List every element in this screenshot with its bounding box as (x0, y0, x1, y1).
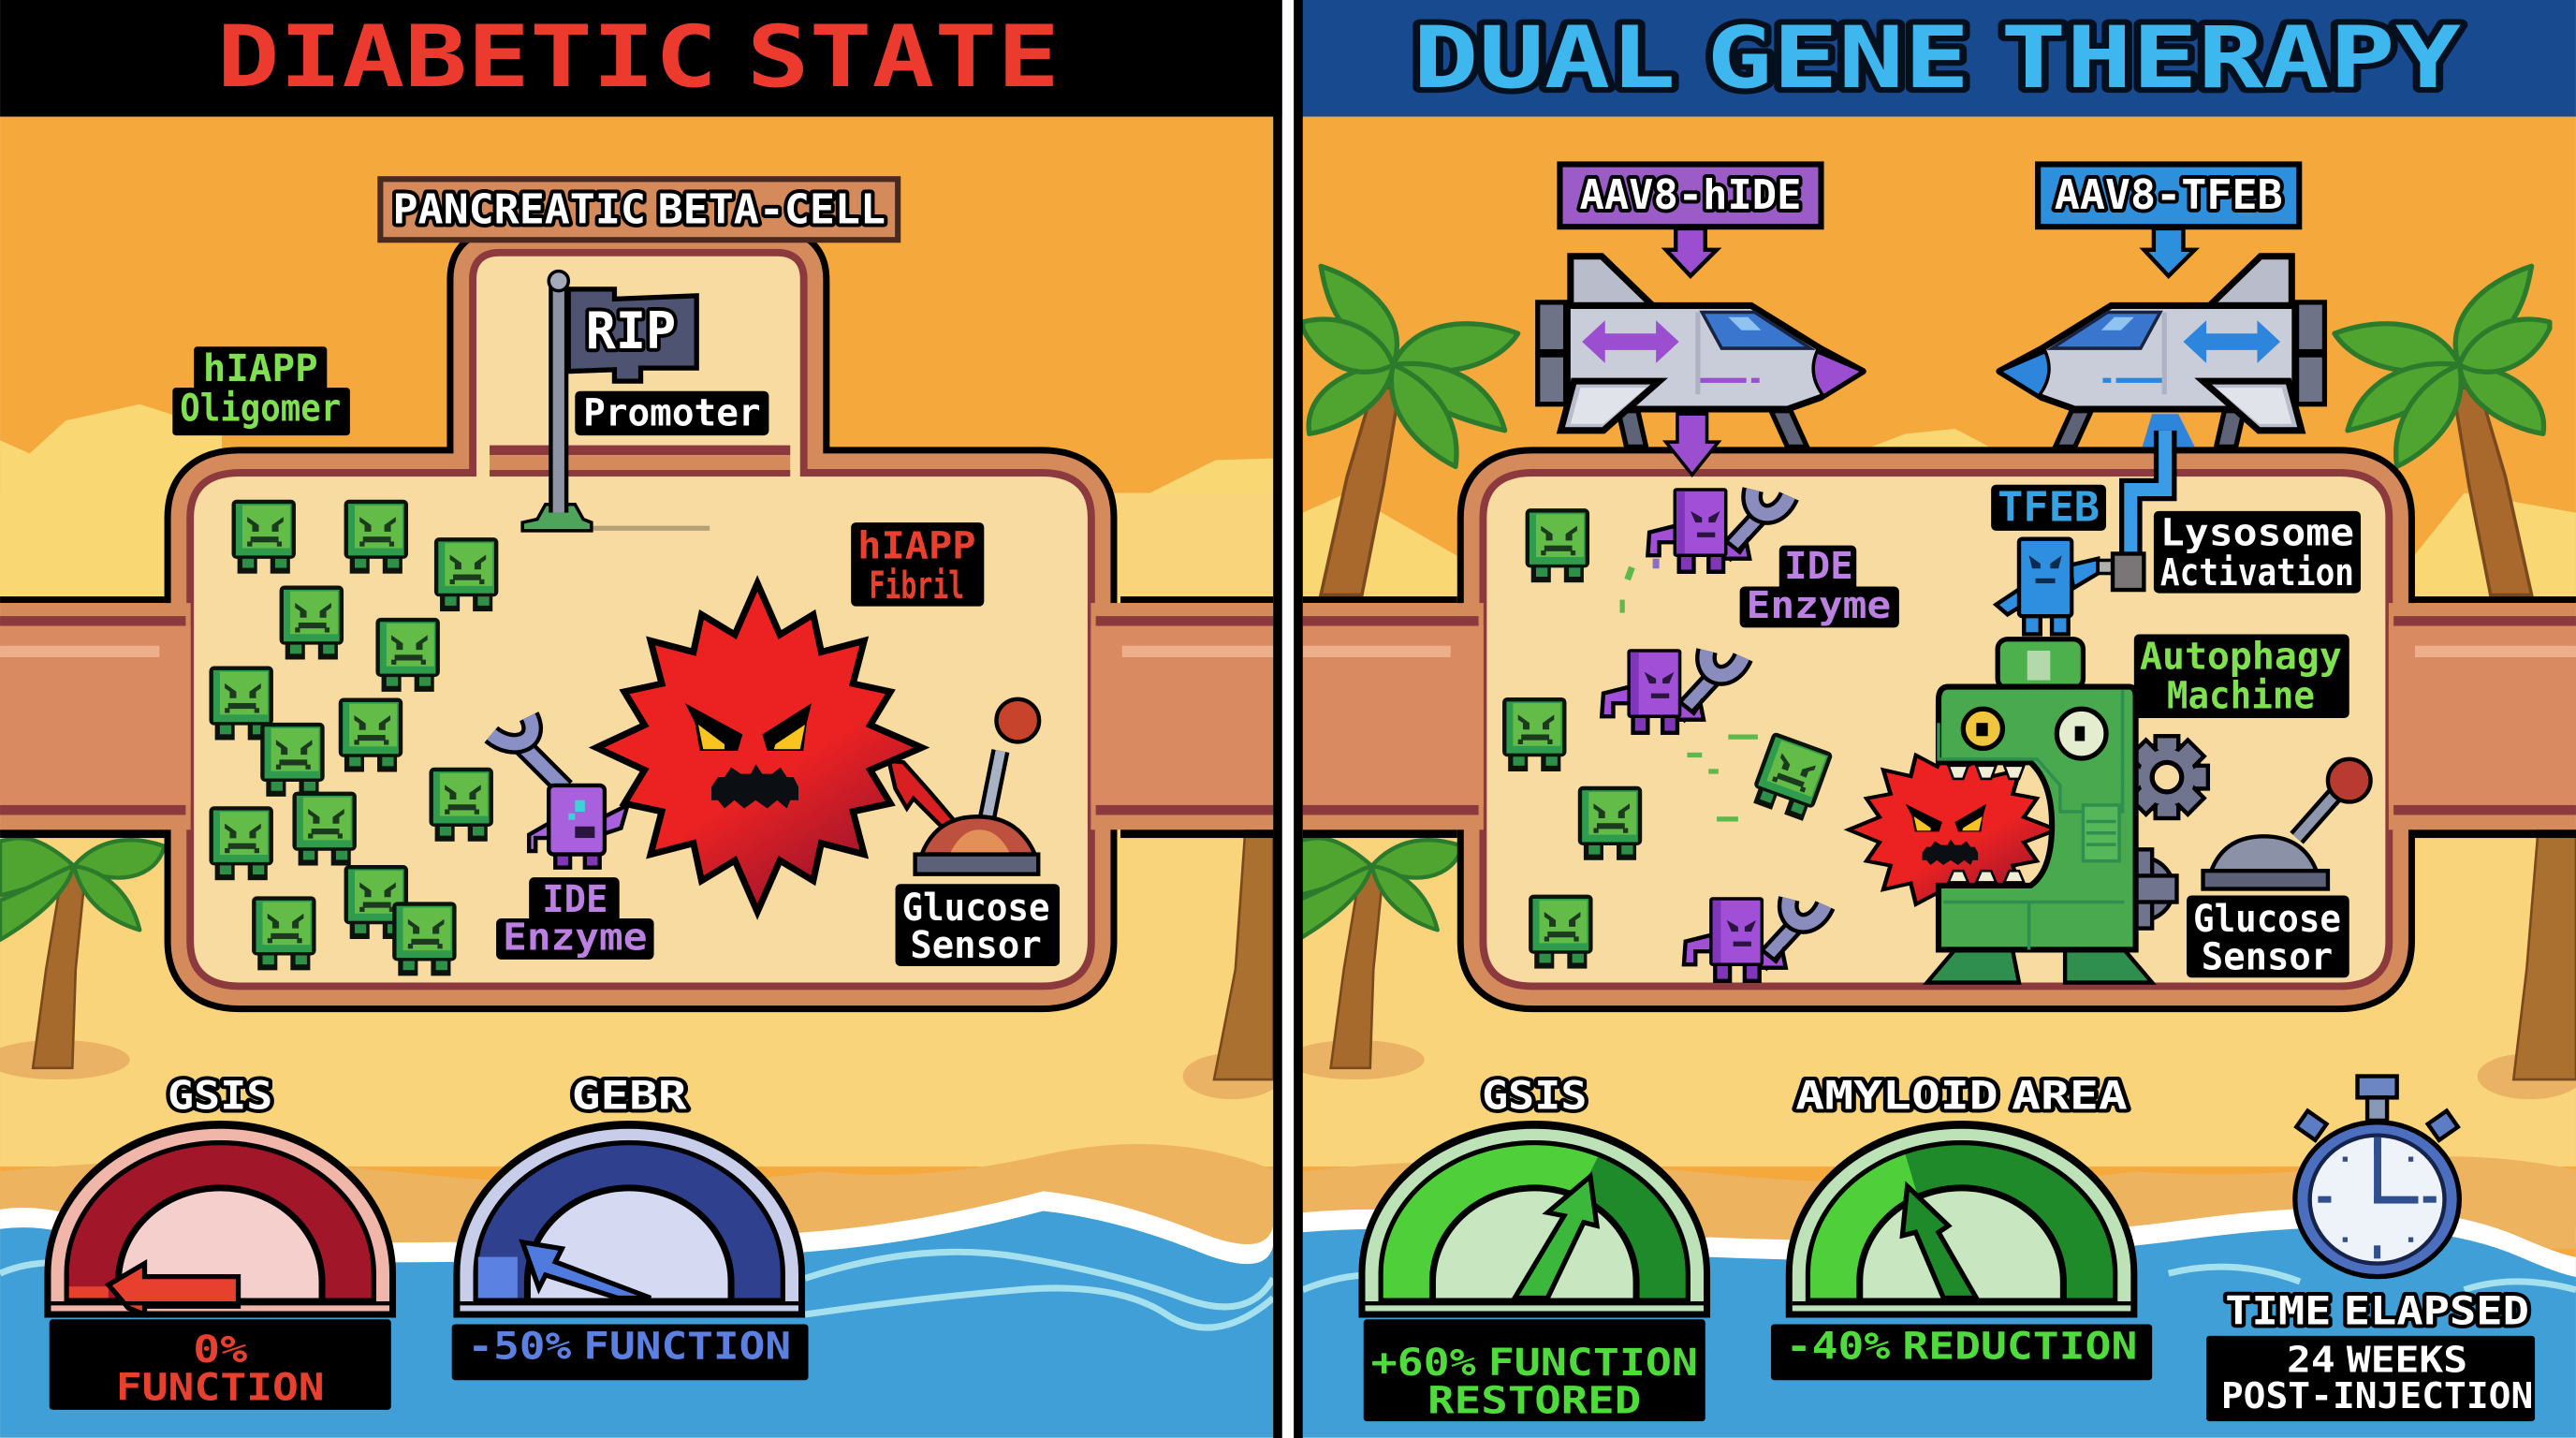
label: IDE enzyme left: Enzyme (503, 915, 648, 959)
label: hIAPP fibril: Fibril (869, 564, 964, 608)
particles: degraded oligomer (1620, 559, 1758, 822)
label: IDE enzyme right (1740, 544, 1899, 627)
icon: stopwatch (2295, 1077, 2459, 1277)
label: lysosome activation (2154, 511, 2361, 594)
label: autophagy machine (2134, 634, 2349, 718)
label: hIAPP oligomer: Oligomer (180, 386, 341, 430)
label: hIAPP oligomer: hIAPP (203, 346, 318, 390)
hIAPP oligomers: treated cell (1502, 508, 1834, 969)
header: diabetic state (0, 0, 1282, 117)
autophagy machine eating fibril (1849, 639, 2208, 983)
label: glucose sensor right: Sensor (2202, 934, 2333, 978)
gauge: GSIS +60% (1358, 1121, 1710, 1318)
readout: 0% function: FUNCTION (116, 1365, 325, 1409)
label: IDE enzyme left (496, 877, 654, 960)
pancreatic beta-cell: right (1303, 477, 2576, 983)
palm trees: right panel (1286, 266, 2576, 1099)
label: hIAPP fibril (851, 522, 984, 608)
hIAPP fibril monster (596, 583, 958, 912)
readout: 24 weeks post-injection (2206, 1336, 2535, 1421)
label: AAV8-TFEB with arrow: AAV8-TFEB (2055, 171, 2283, 219)
TFEB character with plug (1996, 539, 2144, 634)
label: AAV8-hIDE with arrow: AAV8-hIDE (1580, 171, 1801, 219)
label: glucose sensor right (2187, 895, 2349, 978)
panel: diabetic state background (0, 117, 1274, 1438)
centre divider (1273, 0, 1303, 1438)
label: lysosome activation: Activation (2160, 550, 2354, 594)
readout: -40% reduction: -40% REDUCTION (1786, 1324, 2137, 1368)
glucose sensor lever right (2203, 759, 2371, 888)
gauge: amyloid area -40% (1786, 1121, 2137, 1318)
label: glucose sensor left: Glucose (902, 886, 1050, 930)
label: TFEB: TFEB (1998, 483, 2100, 531)
panel: dual gene therapy background (1303, 117, 2576, 1438)
label: time elapsed: TIME ELAPSED (2225, 1288, 2529, 1334)
glucose sensor lever left (915, 699, 1039, 874)
gauge: GEBR -50% (453, 1121, 805, 1318)
IDE enzyme characters with wrenches (1602, 488, 1825, 981)
readout: 0% function: 0% (193, 1328, 248, 1372)
rocket: AAV8-TFEB (1999, 257, 2324, 447)
gauge: GSIS 0% (44, 1121, 396, 1318)
arrow: hIDE delivery (1666, 414, 1719, 475)
label: GSIS left: GSIS (168, 1073, 272, 1119)
palm trees: left panel (0, 829, 1281, 1099)
label: amyloid area: AMYLOID AREA (1795, 1073, 2128, 1119)
readout: 24 weeks post-injection: POST-INJECTION (2221, 1375, 2533, 1417)
readout: 0% function (50, 1319, 391, 1410)
readout: -50% function (452, 1324, 809, 1380)
label: glucose sensor left (896, 884, 1060, 967)
label: glucose sensor right: Glucose (2193, 897, 2341, 941)
label: lysosome activation: Lysosome (2160, 511, 2354, 555)
pancreatic beta-cell: left (0, 257, 1273, 983)
label: hIAPP oligomer (172, 346, 350, 435)
label: autophagy machine: Machine (2167, 673, 2315, 717)
readout: +60% function restored: RESTORED (1427, 1378, 1641, 1422)
IDE enzyme character with wrench (491, 716, 627, 868)
label: AAV8-TFEB with arrow (2038, 165, 2299, 276)
label: IDE enzyme right: Enzyme (1747, 583, 1891, 627)
label: GSIS right: GSIS (1482, 1073, 1587, 1119)
readout: -50% function: -50% FUNCTION (467, 1324, 791, 1368)
header: diabetic state: DIABETIC STATE (217, 7, 1060, 107)
label: IDE enzyme right: IDE (1784, 544, 1853, 588)
label: glucose sensor left: Sensor (910, 923, 1042, 967)
label: hIAPP fibril: hIAPP (857, 524, 976, 568)
readout: +60% function restored (1364, 1319, 1705, 1422)
rocket: AAV8-hIDE (1538, 257, 1863, 447)
readout: -40% reduction (1771, 1324, 2152, 1380)
header: dual gene therapy: DUAL GENE THERAPY (1412, 7, 2461, 108)
arrow: TFEB delivery conduit (2130, 414, 2195, 555)
label: GEBR: GEBR (572, 1073, 687, 1119)
header: dual gene therapy (1295, 0, 2576, 117)
flag: RIP promoter: RIP (586, 301, 676, 360)
label: pancreatic beta-cell: PANCREATIC BETA-CELL (393, 186, 886, 234)
hIAPP oligomer swarm (209, 500, 498, 976)
readout: +60% function restored: +60% FUNCTION (1371, 1341, 1698, 1385)
flag: RIP promoter (522, 271, 710, 531)
label: autophagy machine: Autophagy (2140, 634, 2342, 678)
readout: 24 weeks post-injection: 24 WEEKS (2287, 1339, 2467, 1381)
label: promoter: Promoter (583, 391, 761, 435)
label: AAV8-hIDE with arrow (1559, 165, 1822, 276)
label: IDE enzyme left: IDE (542, 877, 607, 921)
